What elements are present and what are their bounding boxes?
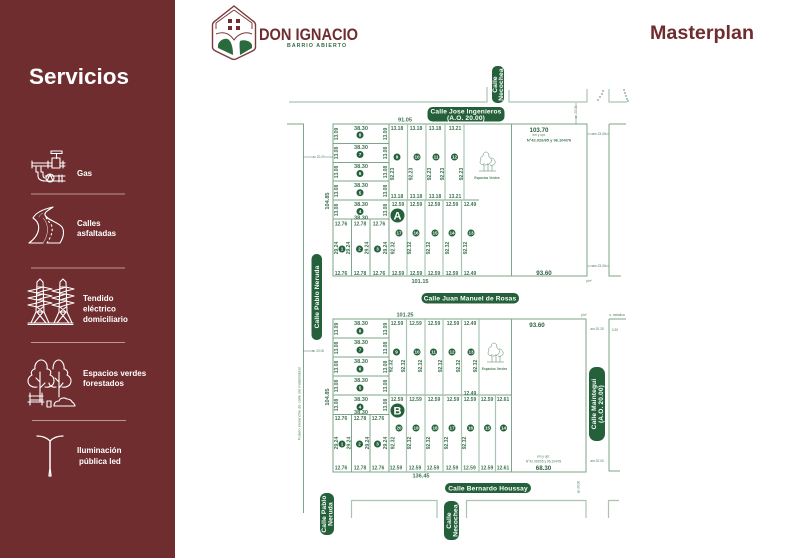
survey annotations: Futuro ensanche de calle sin materializar <box>296 366 302 440</box>
text: DON IGNACIO: DON IGNACIO <box>259 26 358 44</box>
street label: Calle Jose Ingenieros: (A.O. 20.00) <box>447 115 485 122</box>
block A dimensions: 12.59 <box>446 202 458 208</box>
block B dimensions: 12.59 <box>391 397 403 403</box>
block A dimensions: 29.24 <box>383 242 389 254</box>
block B dimensions: 12.59 <box>409 397 422 403</box>
block B dimensions: 92.32 <box>444 437 450 449</box>
street label: Calle Juan Manuel de Rosas: Calle Juan Manuel de Rosas <box>424 296 516 302</box>
block B lot numbers: 19 <box>413 426 419 431</box>
block B dimensions: 12.59 <box>446 466 458 472</box>
survey annotations: s. metalica <box>609 313 625 317</box>
panel: servicios sidebar <box>0 0 175 558</box>
block A dimensions: 13.09 <box>334 128 340 140</box>
block B dimensions: 12.76 <box>372 466 384 472</box>
text: BARRIO ABIERTO: BARRIO ABIERTO <box>287 43 346 49</box>
heading: Servicios: Servicios <box>29 64 129 89</box>
block A lot numbers: 4 <box>359 209 362 214</box>
block A dimensions: 92.32 <box>445 242 451 254</box>
block A dimensions: 13.08 <box>334 185 340 197</box>
block B dimensions: 12.49 <box>464 321 476 327</box>
block B dimensions: 12.59 <box>447 397 459 403</box>
block A dimensions: 12.59 <box>392 202 404 208</box>
block B lot numbers: 5 <box>359 386 362 391</box>
block B dimensions: 13.08 <box>383 399 389 411</box>
block B dimensions: 13.08 <box>383 380 389 392</box>
block A dimensions: 92.32 <box>407 242 413 254</box>
block A lot numbers: 17 <box>396 231 402 236</box>
icon: gas pipes <box>32 151 65 182</box>
street label: Calle Pablo Neruda: Calle Pablo Neruda <box>314 265 321 328</box>
survey annotations: an 20.00 <box>574 106 578 118</box>
block B dimensions: 92.32 <box>456 360 462 372</box>
block A dimensions: 29.24 <box>334 242 340 254</box>
text: Iluminación pública led: pública led <box>79 457 121 466</box>
text: Tendido eléctrico domiciliario: eléctrico <box>83 304 116 314</box>
icon: street lamp <box>37 436 63 476</box>
block B dimensions: 38.30 <box>354 410 368 416</box>
block B lot numbers: 2 <box>358 442 361 447</box>
block A lot numbers: 12 <box>452 155 457 160</box>
street label: Calle Pablo Neruda <box>312 254 322 340</box>
block A dimensions: 103.70 <box>530 127 549 134</box>
block A lot numbers: 7 <box>359 152 362 157</box>
block B dimensions: 29.24 <box>383 437 389 449</box>
block B lot numbers: B <box>394 406 402 418</box>
block A dimensions: 13.08 <box>334 204 340 216</box>
block B dimensions: 13.09 <box>383 323 389 335</box>
block A lot numbers: 9 <box>396 155 399 160</box>
street label: Calle Maintegui: Calle Maintegui <box>591 379 598 429</box>
survey annotations: pin* <box>581 313 588 317</box>
block A dimensions: 13.21 <box>449 194 461 200</box>
block B dimensions: 38.30 <box>354 359 368 365</box>
block B dimensions: 13.08 <box>334 399 340 411</box>
block B lot numbers: 11 <box>431 350 436 355</box>
block B dimensions: 92.32 <box>390 437 396 449</box>
block A lot numbers: 10 <box>414 155 420 160</box>
street label: Calle Jose Ingenieros: Calle Jose Ingenieros <box>431 108 502 116</box>
block B dimensions: 101.25 <box>396 312 414 318</box>
block A dimensions: 12.76 <box>335 271 347 277</box>
survey annotations: an 20.00 <box>312 155 325 159</box>
street label: Calle Necochea top <box>492 66 505 103</box>
block B dimensions: 12.59 <box>390 466 402 472</box>
block A lot lines <box>333 124 587 276</box>
block A lot numbers <box>338 132 474 252</box>
icon: trees and bench <box>28 360 75 407</box>
block B dimensions: 92.32 <box>418 360 424 372</box>
block B dimensions: 13.08 <box>334 380 340 392</box>
block A dimensions: 38.30 <box>354 164 368 170</box>
street label: Calle Pablo Neruda bottom <box>320 493 334 535</box>
block A dimensions: 92.23 <box>427 168 433 180</box>
block B dimensions: 12.59 <box>481 466 493 472</box>
text: Iluminación pública led: Iluminación <box>77 446 122 455</box>
text: Espacios Verdes A: Espacios Verdes <box>474 176 500 180</box>
block B dimensions: em y opt. <box>537 454 550 458</box>
survey annotations: am 23.00 <box>592 264 606 268</box>
street label: Calle Juan Manuel de Rosas <box>422 293 519 304</box>
block B dimensions: 92.32 <box>401 360 407 372</box>
block B dimensions: 12.61 <box>497 397 509 403</box>
street label: Calle Bernardo Houssay <box>445 483 531 493</box>
block A dimensions: em y opt. <box>532 133 546 137</box>
block B lot numbers: 12 <box>449 350 455 355</box>
block A dimensions: 12.59 <box>392 271 404 277</box>
block B dimensions: 92.32 <box>407 437 413 449</box>
street label: Calle Pablo Neruda bottom: Neruda <box>328 502 334 526</box>
block B dimensions: 38.30 <box>354 321 368 327</box>
block B dimensions: 12.59 <box>427 466 439 472</box>
block A dimensions: 12.78 <box>354 271 366 277</box>
block A dimensions: 12.59 <box>410 271 422 277</box>
block A dimensions: 12.49 <box>464 271 476 277</box>
block B dimensions: 12.59 <box>481 397 493 403</box>
heading: Masterplan: Masterplan <box>650 22 754 44</box>
block A dimensions: 13.18 <box>429 194 441 200</box>
text: Espacios Verdes B: Espacios Verdes <box>482 367 507 371</box>
block A dimensions: 92.32 <box>390 242 396 254</box>
block B dimensions: 12.59 <box>391 321 403 327</box>
block B dimensions: 136.45 <box>412 474 430 480</box>
block A dimensions: 12.59 <box>428 271 440 277</box>
block A dimensions: 12.59 <box>446 271 458 277</box>
block A dimensions: 91.05 <box>398 118 412 124</box>
block B lot numbers: 18 <box>432 426 438 431</box>
block A lot numbers: 8 <box>359 133 362 138</box>
block A dimensions: 92.32 <box>463 242 469 254</box>
survey annotations: am 23.00 <box>592 132 606 136</box>
icon: espacios verdes A <box>474 152 500 180</box>
block A dimensions: 13.18 <box>429 126 441 132</box>
block A dimensions: 13.08 <box>334 166 340 178</box>
block B lot numbers: 9 <box>395 350 398 355</box>
block A lot numbers: 6 <box>359 171 362 176</box>
block A dimensions: 12.76 <box>373 222 385 228</box>
block A dimensions: 13.08 <box>383 185 389 197</box>
icon: asphalt road <box>29 207 63 243</box>
block A dimensions: 13.18 <box>391 126 403 132</box>
block B dimensions: 12.59 <box>463 466 476 472</box>
block B dimensions: 13.08 <box>383 342 389 354</box>
block B dimensions: 13.09 <box>334 323 340 335</box>
block B dimensions: 104.85 <box>325 388 331 406</box>
block B lot numbers: 7 <box>359 348 362 353</box>
block B dimensions: 12.76 <box>335 416 347 422</box>
text: Espacios verdes forestados: Espacios verdes <box>83 369 147 378</box>
block B dimensions: 29.24 <box>365 437 371 449</box>
icon: espacios verdes B <box>482 343 507 371</box>
block B dimensions: 38.30 <box>354 397 368 403</box>
block A lot numbers: 3 <box>376 247 379 252</box>
street label: Calle Maintegui <box>589 367 605 441</box>
block A dimensions: N°42.026/65 y 96.104/76 <box>527 138 572 142</box>
icon: house shield <box>212 6 256 59</box>
street label: Calle Jose Ingenieros <box>428 107 504 122</box>
block B lot numbers: 16 <box>468 426 473 431</box>
block A dimensions: 92.23 <box>440 168 446 180</box>
road outlines <box>287 87 629 518</box>
block B lot numbers: 1 <box>341 442 344 447</box>
block B dimensions: 12.76 <box>372 416 384 422</box>
block A dimensions: 13.08 <box>334 147 340 159</box>
block B lot numbers: 14 <box>501 426 506 431</box>
block A dimensions: 92.23 <box>408 168 414 180</box>
block A dimensions: 93.60 <box>536 270 552 277</box>
survey annotations: 0.30 <box>612 328 618 332</box>
survey annotations: am 20.00 <box>590 459 604 463</box>
block A dimensions: 13.08 <box>383 204 389 216</box>
block B dimensions: 68.30 <box>536 465 552 472</box>
block B dimensions: 12.59 <box>428 321 440 327</box>
block A dimensions <box>325 118 572 285</box>
block B lot numbers: 10 <box>414 350 420 355</box>
block A dimensions: 38.30 <box>354 126 368 132</box>
block B dimensions: 29.24 <box>334 437 340 449</box>
block B dimensions: 13.08 <box>334 342 340 354</box>
block B dimensions: 13.08 <box>383 361 389 373</box>
block B lot numbers: 8 <box>359 329 362 334</box>
block B dimensions: 12.59 <box>428 397 440 403</box>
block A dimensions: 38.30 <box>354 183 368 189</box>
block B dimensions: 12.59 <box>409 466 421 472</box>
street label: Calle Maintegui: (A.O. 20.00) <box>598 385 605 423</box>
block A dimensions: 12.76 <box>373 271 385 277</box>
block A dimensions: 12.49 <box>464 202 476 208</box>
text: Calles asfaltadas: Calles <box>77 219 101 228</box>
block A dimensions: 12.59 <box>428 202 440 208</box>
block B dimensions <box>325 312 561 480</box>
icon: power towers <box>28 279 74 324</box>
street label: Calle Necochea top: Necochea <box>498 68 505 101</box>
block B dimensions: 92.32 <box>473 360 479 372</box>
logo: Don Ignacio <box>212 6 358 59</box>
survey annotations: pin* <box>586 279 593 283</box>
block B dimensions: 12.78 <box>354 416 366 422</box>
block B dimensions: 13.08 <box>334 361 340 373</box>
block A dimensions: 92.32 <box>426 242 432 254</box>
block A lot numbers: 1 <box>341 247 344 252</box>
block A dimensions: 13.08 <box>383 147 389 159</box>
block B dimensions: 29.24 <box>346 437 352 449</box>
block B dimensions: 12.59 <box>447 321 459 327</box>
text: Tendido eléctrico domiciliario: Tendido <box>83 294 114 303</box>
block A dimensions: 101.15 <box>411 279 429 285</box>
block A dimensions: 29.24 <box>364 242 370 254</box>
block A lot numbers: 16 <box>413 231 419 236</box>
block B dimensions: 12.78 <box>354 466 366 472</box>
block B dimensions: 12.59 <box>464 397 476 403</box>
block A lot numbers: 14 <box>449 231 455 236</box>
survey annotations: am 20.25 <box>590 327 604 331</box>
street label: Calle Necochea top: Calle <box>492 76 499 93</box>
block B dimensions: 12.49 <box>464 391 476 397</box>
block B dimensions: 92.32 <box>388 360 394 372</box>
block B dimensions: 93.60 <box>529 322 545 329</box>
street label: Calle Necochea bottom: Necochea <box>452 504 460 537</box>
text: Calles asfaltadas: asfaltadas <box>77 229 117 238</box>
block B lot numbers: 15 <box>485 426 490 431</box>
block B dimensions: 92.32 <box>438 360 444 372</box>
block B lot numbers: 17 <box>449 426 455 431</box>
survey annotations <box>296 103 625 493</box>
street label: Calle Bernardo Houssay: Calle Bernardo Houssay <box>448 486 528 492</box>
block B dimensions: 38.30 <box>354 340 368 346</box>
block B lot numbers: 6 <box>359 367 362 372</box>
text: Gas: Gas <box>77 169 93 178</box>
block A dimensions: 12.78 <box>354 222 366 228</box>
block A dimensions: 12.76 <box>335 222 347 228</box>
block B dimensions: 12.76 <box>335 466 347 472</box>
block A dimensions: 104.85 <box>325 192 331 210</box>
block A dimensions: 13.18 <box>410 194 422 200</box>
street label: Calle Necochea bottom <box>444 501 460 540</box>
block A lot numbers: 11 <box>434 155 439 160</box>
block A dimensions: 13.09 <box>383 128 389 140</box>
block B lot lines <box>333 319 586 472</box>
block B lot numbers: 4 <box>359 405 362 410</box>
block A dimensions: 29.24 <box>346 242 352 254</box>
block A dimensions: 12.59 <box>410 202 422 208</box>
block A lot numbers: A <box>394 210 402 222</box>
survey annotations: an 20.00 <box>576 481 580 493</box>
block A lot numbers: 15 <box>432 231 438 236</box>
block B lot numbers: 3 <box>376 442 379 447</box>
block B dimensions: 12.61 <box>497 466 509 472</box>
block A dimensions: 13.18 <box>410 126 422 132</box>
block A dimensions: 38.30 <box>354 202 368 208</box>
block B lot numbers: 13 <box>468 350 474 355</box>
block A dimensions: 13.08 <box>383 166 389 178</box>
block A lot numbers: 2 <box>358 247 361 252</box>
block A dimensions: 13.18 <box>391 194 403 200</box>
street label: Calle Pablo Neruda bottom: Calle Pablo <box>321 495 328 533</box>
text: Tendido eléctrico domiciliario: domiciliario <box>83 315 128 324</box>
block B dimensions: 12.59 <box>409 321 422 327</box>
block A lot numbers: 5 <box>359 190 362 195</box>
block B dimensions: 92.32 <box>426 437 432 449</box>
block A dimensions: 92.23 <box>390 168 396 180</box>
block B lot numbers: 20 <box>396 426 402 431</box>
block B dimensions: N°42.026/65 y 96.104/78 <box>526 460 561 464</box>
block A dimensions: 38.30 <box>354 145 368 151</box>
masterplan map <box>287 66 629 540</box>
block A dimensions: 92.23 <box>459 168 465 180</box>
street label: Calle Necochea bottom: Calle <box>446 512 453 529</box>
block A lot numbers: 13 <box>468 231 474 236</box>
block B dimensions: 92.32 <box>462 437 468 449</box>
block A dimensions: 38.30 <box>354 216 368 222</box>
block B dimensions: 38.30 <box>354 378 368 384</box>
survey annotations: an 20.00 <box>312 349 324 353</box>
text: Espacios verdes forestados: forestados <box>83 379 124 388</box>
block A dimensions: 13.21 <box>449 126 461 132</box>
block B lot numbers <box>338 328 507 448</box>
